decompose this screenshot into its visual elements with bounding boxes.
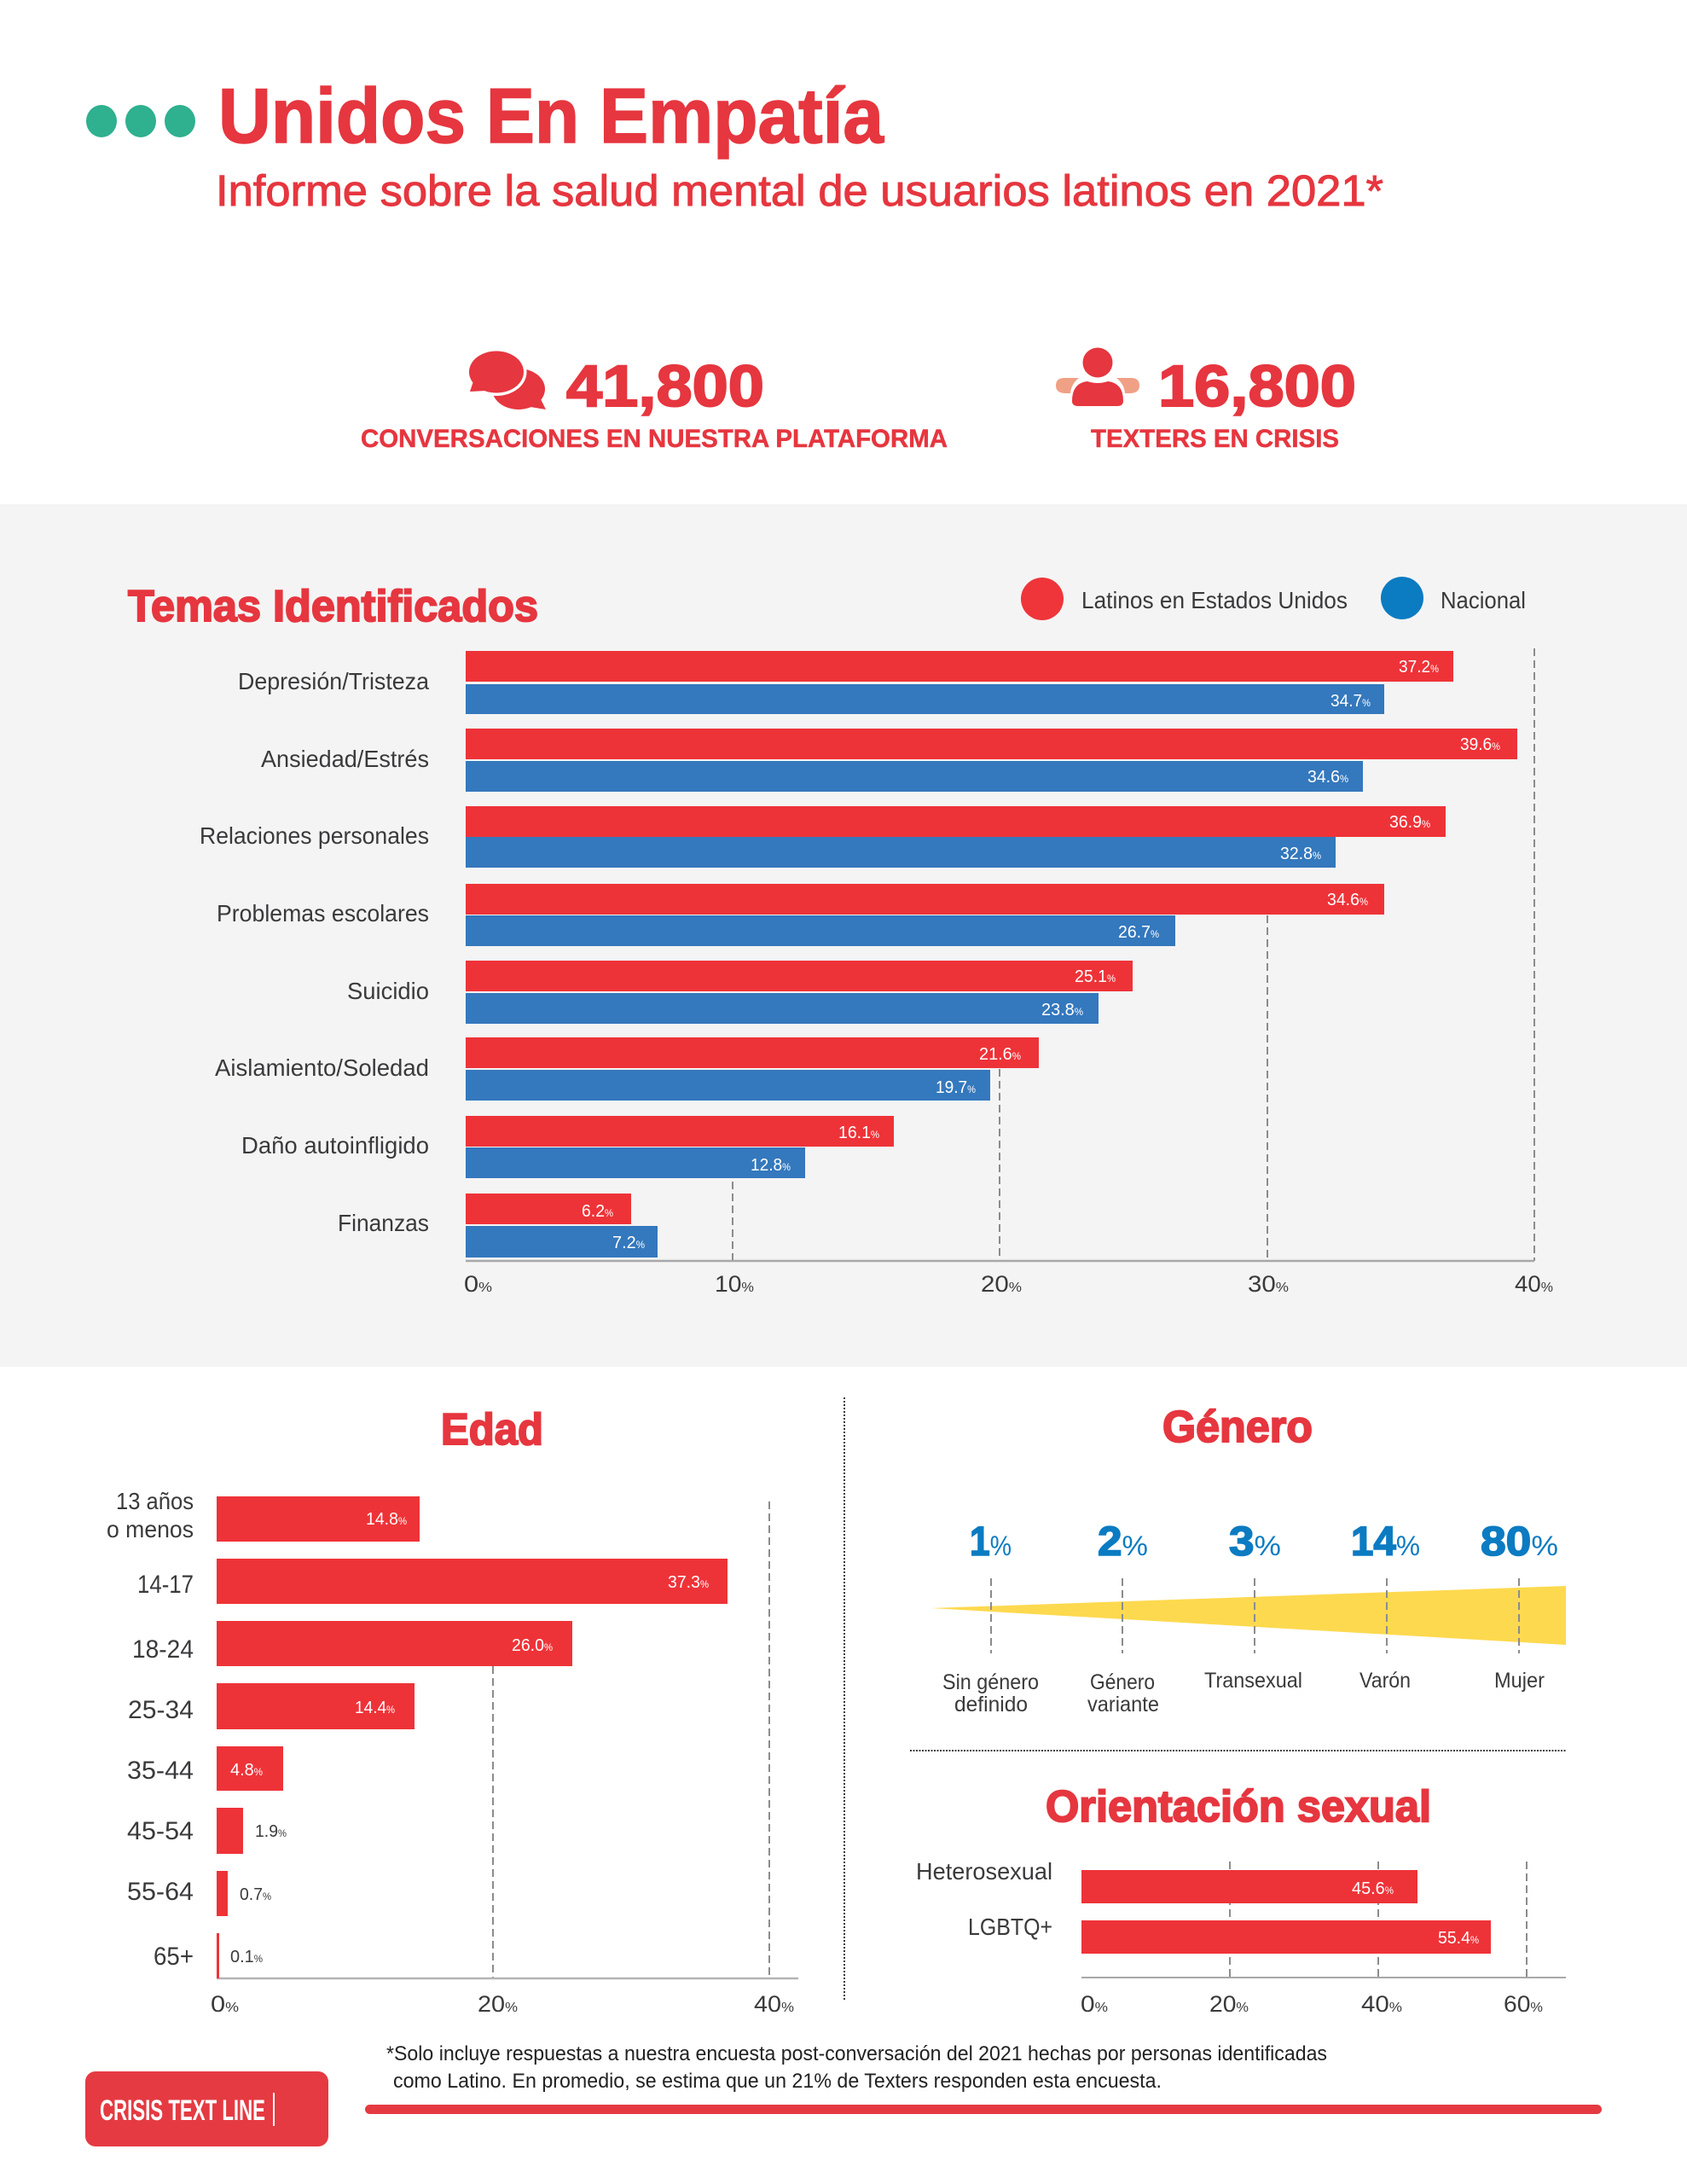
- category labels: Mujer: [1494, 1669, 1545, 1693]
- stat: conversations: [361, 348, 948, 453]
- row: LGBTQ+: [968, 1914, 1491, 1954]
- row: Aislamiento/Soledad: Aislamiento/Soledad: [215, 1054, 429, 1081]
- panel: género: [931, 1403, 1566, 1716]
- panel: edad: [107, 1405, 798, 2017]
- row: 55-64: 55-64: [127, 1878, 194, 1906]
- category labels: variante: [1087, 1693, 1159, 1716]
- axis labels: 60%: [1504, 1991, 1543, 2017]
- axis labels: 0%: [211, 1991, 239, 2017]
- legend: Nacional: [1441, 587, 1526, 613]
- row: 13 años o menos: 13 años: [116, 1488, 194, 1514]
- logo: crisis text line: [85, 2071, 328, 2146]
- row: 55-64: 0.7%: [240, 1885, 271, 1904]
- stat number: 41,800: [566, 353, 764, 419]
- row: 25-34: 25-34: [128, 1696, 194, 1724]
- percentages: 14%: [1351, 1519, 1420, 1565]
- bar chart: orientación: [916, 1858, 1566, 2017]
- row: Relaciones personales: Relaciones personales: [200, 822, 429, 849]
- percentages: 1%: [970, 1519, 1012, 1565]
- heading: Edad: [441, 1405, 543, 1455]
- panel: temas identificados: [0, 504, 1687, 1367]
- stat caption: CONVERSACIONES EN NUESTRA PLATAFORMA: [361, 425, 948, 453]
- row: Depresión/Tristeza: Depresión/Tristeza: [238, 668, 429, 694]
- footnote: [386, 2042, 1327, 2093]
- row: 45-54: 1.9%: [255, 1822, 287, 1841]
- category labels: [942, 1669, 1545, 1716]
- axis labels: 20%: [1209, 1991, 1249, 2017]
- row: Finanzas: 7.2%: [612, 1234, 645, 1252]
- row: 45-54: [127, 1808, 287, 1854]
- row: Relaciones personales: 32.8%: [1280, 845, 1321, 863]
- row: Depresión/Tristeza: [238, 651, 1453, 714]
- row: Suicidio: [347, 961, 1133, 1024]
- chart: yellow wedge: [931, 1578, 1566, 1653]
- header: [86, 73, 1383, 215]
- footnote: *Solo incluye respuestas a nuestra encuesta post-conversación del 2021 hechas por personas identificadas: [386, 2042, 1327, 2065]
- row: Ansiedad/Estrés: 39.6%: [1460, 735, 1500, 754]
- axis labels: [211, 1991, 794, 2017]
- axis labels: 30%: [1248, 1271, 1289, 1297]
- row: 18-24: 18-24: [132, 1635, 194, 1664]
- row: Finanzas: [338, 1194, 658, 1258]
- bar chart: edad: [107, 1488, 798, 2017]
- row: 25-34: 14.4%: [355, 1699, 395, 1717]
- row: 45-54: 45-54: [127, 1817, 194, 1845]
- category labels: Sin género: [942, 1670, 1039, 1694]
- bar chart: temas: [200, 648, 1553, 1297]
- footnote: como Latino. En promedio, se estima que un 21% de Texters responden esta encuesta.: [393, 2070, 1162, 2093]
- axis labels: 40%: [1361, 1991, 1402, 2017]
- row: 65+: [154, 1933, 263, 1978]
- row: Suicidio: 25.1%: [1075, 967, 1116, 986]
- stat caption: TEXTERS EN CRISIS: [1091, 425, 1339, 453]
- row: Finanzas: Finanzas: [338, 1210, 429, 1236]
- row: Problemas escolares: [217, 884, 1384, 946]
- row: 18-24: 26.0%: [512, 1636, 553, 1655]
- axis labels: [464, 1271, 1553, 1297]
- row: Heterosexual: Heterosexual: [916, 1858, 1052, 1885]
- row: LGBTQ+: 55.4%: [1438, 1929, 1479, 1948]
- title: Unidos En Empatía: [218, 73, 884, 160]
- row: Aislamiento/Soledad: 21.6%: [979, 1045, 1021, 1064]
- row: 13 años o menos: 14.8%: [366, 1510, 407, 1529]
- category labels: Transexual: [1204, 1669, 1302, 1693]
- row: 35-44: [127, 1746, 283, 1791]
- icon: person: [1056, 348, 1139, 406]
- axis labels: 20%: [478, 1991, 518, 2017]
- row: LGBTQ+: LGBTQ+: [968, 1914, 1052, 1940]
- stat number: 16,800: [1158, 353, 1356, 419]
- row: Aislamiento/Soledad: 19.7%: [936, 1078, 976, 1097]
- percentages: 3%: [1229, 1519, 1281, 1565]
- axis labels: 20%: [981, 1271, 1022, 1297]
- row: 14-17: 37.3%: [668, 1573, 709, 1592]
- row: Finanzas: 6.2%: [582, 1202, 613, 1221]
- icon: three green dots: [86, 105, 195, 137]
- row: Suicidio: Suicidio: [347, 978, 429, 1004]
- heading: Temas Identificados: [128, 582, 538, 631]
- row: Daño autoinfligido: Daño autoinfligido: [241, 1132, 429, 1159]
- percentages: 80%: [1481, 1519, 1558, 1565]
- panel: orientación sexual: [916, 1782, 1566, 2017]
- icon: chat bubbles: [466, 348, 546, 410]
- row: 13 años o menos: o menos: [107, 1516, 194, 1542]
- heading: Orientación sexual: [1046, 1782, 1431, 1832]
- row: 65+: 0.1%: [230, 1948, 263, 1966]
- logo: crisis text line: CRISIS TEXT LINE: [100, 2094, 265, 2127]
- row: 55-64: [127, 1871, 271, 1916]
- row: Daño autoinfligido: 12.8%: [751, 1156, 791, 1175]
- percentages: 2%: [1098, 1519, 1148, 1565]
- axis labels: 10%: [715, 1271, 754, 1297]
- row: Heterosexual: 45.6%: [1352, 1879, 1394, 1898]
- row: Problemas escolares: 26.7%: [1118, 923, 1159, 942]
- row: 14-17: 14-17: [137, 1571, 194, 1599]
- row: 18-24: [132, 1621, 572, 1666]
- legend: Latinos en Estados Unidos: [1081, 587, 1348, 613]
- row: Aislamiento/Soledad: [215, 1037, 1039, 1101]
- row: 14-17: [137, 1559, 728, 1604]
- legend: [1021, 577, 1526, 620]
- row: 35-44: 4.8%: [230, 1761, 263, 1780]
- percentages: [970, 1519, 1558, 1565]
- row: Suicidio: 23.8%: [1041, 1001, 1083, 1019]
- row: Heterosexual: [916, 1858, 1417, 1903]
- footer red bar: [365, 2105, 1602, 2114]
- category labels: Género: [1090, 1670, 1155, 1694]
- row: Depresión/Tristeza: 37.2%: [1399, 658, 1439, 677]
- axis labels: 0%: [464, 1271, 492, 1297]
- stat: texters: [1056, 348, 1356, 453]
- row: Ansiedad/Estrés: Ansiedad/Estrés: [261, 746, 429, 772]
- row: Problemas escolares: Problemas escolares: [217, 900, 429, 926]
- axis labels: 0%: [1081, 1991, 1108, 2017]
- axis labels: 40%: [1515, 1271, 1553, 1297]
- row: Ansiedad/Estrés: [261, 729, 1517, 792]
- row: 35-44: 35-44: [127, 1757, 194, 1785]
- heading: Género: [1162, 1403, 1313, 1452]
- row: Daño autoinfligido: 16.1%: [838, 1124, 879, 1142]
- row: 13 años o menos: [107, 1488, 420, 1542]
- category labels: Varón: [1359, 1669, 1411, 1693]
- axis labels: [1081, 1991, 1543, 2017]
- row: Daño autoinfligido: [241, 1116, 894, 1178]
- row: Relaciones personales: [200, 806, 1446, 868]
- axis labels: 40%: [754, 1991, 794, 2017]
- row: Ansiedad/Estrés: 34.6%: [1307, 768, 1348, 787]
- row: Depresión/Tristeza: 34.7%: [1330, 692, 1371, 711]
- row: Problemas escolares: 34.6%: [1327, 891, 1368, 909]
- category labels: definido: [954, 1693, 1028, 1716]
- row: 65+: 65+: [154, 1943, 194, 1971]
- subtitle: Informe sobre la salud mental de usuarios latinos en 2021*: [216, 166, 1383, 215]
- row: Relaciones personales: 36.9%: [1389, 813, 1430, 832]
- row: 25-34: [128, 1683, 415, 1729]
